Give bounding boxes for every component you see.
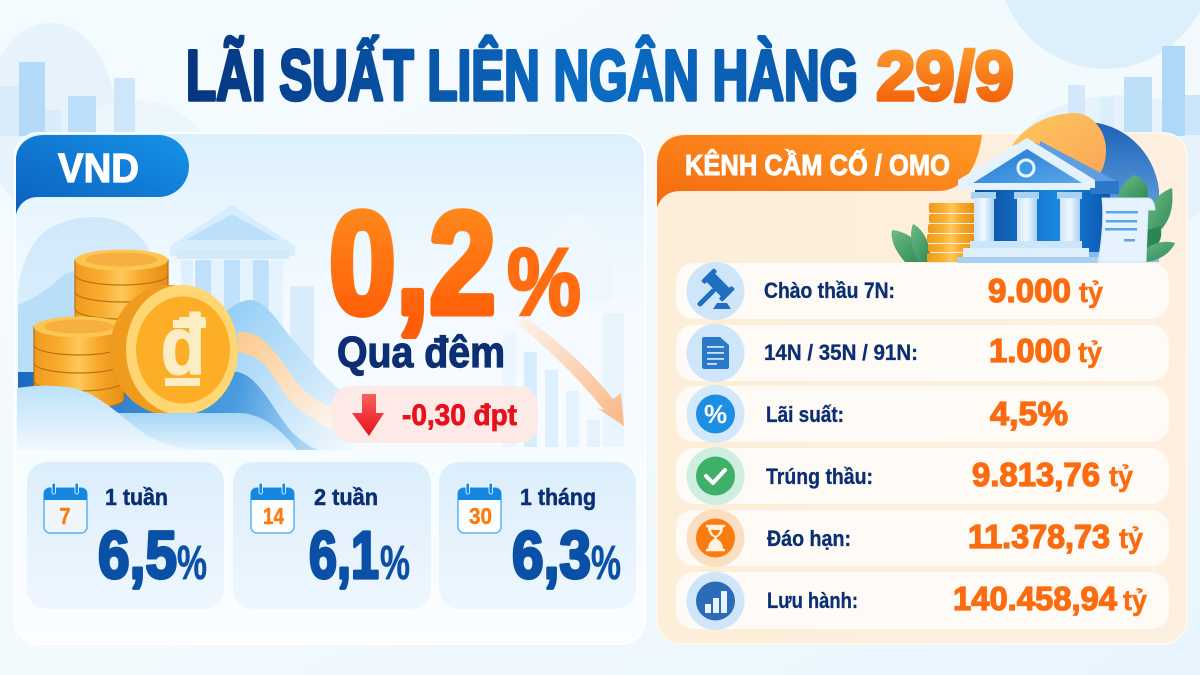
- icon: dong coin: [110, 285, 238, 415]
- icon: calendar 7: 7: [60, 503, 70, 529]
- tab: OMO: [657, 135, 982, 208]
- row: interest rate: Lãi suất:: [766, 402, 844, 427]
- icon: coin column: [927, 203, 975, 262]
- row: winning bids: 9.813,76: [972, 456, 1100, 493]
- label: overnight: Qua đêm: [337, 328, 505, 377]
- icon: calendar 30: [458, 483, 501, 533]
- big rate: %: [507, 229, 581, 336]
- row: winning bids: [676, 447, 1169, 505]
- big rate: 0,2: [329, 182, 496, 344]
- icon: dong coin: đ: [161, 298, 205, 392]
- row: auction 7N: tỷ: [1079, 277, 1103, 309]
- row: maturing: 11.378,73: [968, 518, 1110, 555]
- row: outstanding: 140.458,94: [953, 580, 1118, 617]
- icon: coin stack front: [34, 316, 124, 409]
- row: 14N 35N 91N: 1.000: [989, 332, 1071, 369]
- card: 1 week: 1 tuần: [105, 484, 168, 510]
- row: auction 7N: [676, 262, 1169, 320]
- card: 2 weeks: 6,1: [309, 518, 379, 593]
- card: 1 month: 6,3: [512, 518, 591, 593]
- card: 1 month: %: [591, 537, 621, 590]
- icon: calendar 7: [44, 483, 87, 533]
- row: maturing: Đáo hạn:: [767, 526, 851, 551]
- tab: VND: VND: [58, 145, 139, 191]
- row: winning bids: Trúng thầu:: [766, 464, 873, 489]
- title: 29/9: [876, 37, 1014, 115]
- illustration: bank with coins and document: [892, 113, 1175, 263]
- row: 14N 35N 91N: tỷ: [1078, 337, 1102, 369]
- icon: bars: [686, 572, 744, 630]
- icon: leaves left: [892, 224, 930, 262]
- row: interest rate: 4,5%: [990, 395, 1068, 432]
- card: 2 weeks: 2 tuần: [314, 484, 378, 510]
- icon: hourglass: [686, 509, 744, 567]
- change pill: -0,30 đpt: [402, 399, 517, 432]
- panel: OMO: [657, 113, 1187, 644]
- row: maturing: tỷ: [1119, 523, 1143, 555]
- card: 1 month: 1 tháng: [520, 484, 596, 510]
- icon: gavel: [686, 262, 744, 320]
- tab: VND: [16, 135, 189, 215]
- row: winning bids: tỷ: [1109, 461, 1133, 493]
- row: outstanding: Lưu hành:: [767, 588, 858, 613]
- title: LÃI SUẤT LIÊN NGÂN HÀNG: [186, 36, 858, 116]
- icon: calendar 30: 30: [469, 503, 492, 529]
- icon: bank: [957, 138, 1119, 263]
- row: 14N 35N 91N: [676, 324, 1169, 382]
- row: outstanding: tỷ: [1123, 585, 1147, 617]
- row: outstanding: [676, 572, 1169, 630]
- card: 1 week: %: [177, 537, 207, 590]
- icon: calendar 14: 14: [263, 503, 284, 529]
- illustration: coins on blue hills: [17, 205, 352, 450]
- icon: red down arrow: [352, 394, 384, 436]
- card: 1 week: [27, 462, 224, 609]
- icon: document: [686, 324, 744, 382]
- panel: VND: [15, 133, 645, 644]
- card: 1 month: [439, 462, 636, 609]
- icon: calendar 14: [251, 483, 294, 533]
- card: 2 weeks: %: [380, 537, 410, 590]
- icon: percent: %: [704, 399, 727, 429]
- icon: percent: [686, 385, 744, 443]
- row: maturing: [676, 509, 1169, 567]
- card: 2 weeks: [233, 462, 431, 609]
- row: auction 7N: Chào thầu 7N:: [764, 278, 895, 303]
- decorative chart and down arrow: [502, 214, 624, 447]
- icon: coin stack back: [75, 250, 168, 336]
- icon: leaves right: [1118, 175, 1175, 262]
- icon: check: [686, 447, 744, 505]
- row: interest rate: [676, 385, 1169, 443]
- tab: OMO: KÊNH CẦM CỐ / OMO: [685, 148, 950, 182]
- card: 1 week: 6,5: [98, 518, 177, 593]
- row: auction 7N: 9.000: [988, 272, 1071, 309]
- change pill: [332, 386, 538, 443]
- row: 14N 35N 91N: 14N / 35N / 91N:: [764, 340, 918, 365]
- icon: document: [1098, 198, 1155, 262]
